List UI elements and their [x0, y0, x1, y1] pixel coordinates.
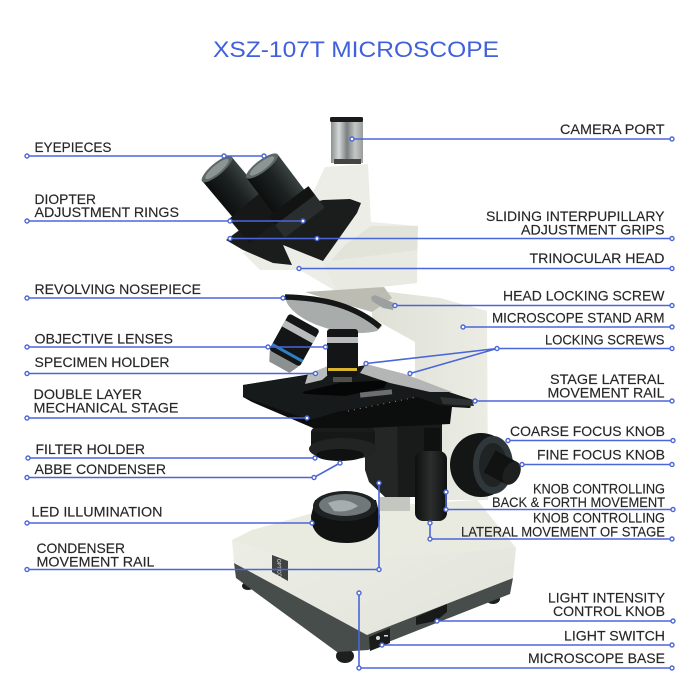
label: objective lenses	[25, 330, 328, 349]
label: knob controlling lateral movement of stage: KNOB CONTROLLING	[533, 510, 665, 526]
label: stage lateral movement rail	[473, 371, 674, 403]
label: stage lateral movement rail: MOVEMENT RAIL	[548, 384, 665, 400]
label: head locking screw	[393, 288, 674, 308]
label: condenser movement rail: CONDENSER	[36, 540, 125, 556]
label: diopter adjustment rings: DIOPTER	[34, 191, 96, 207]
label: specimen holder	[25, 354, 318, 376]
label: eyepieces	[25, 139, 266, 158]
label: microscope stand arm	[461, 309, 674, 329]
brand plate	[272, 555, 288, 581]
label: Abbe condenser	[25, 461, 342, 480]
light intensity knob	[416, 604, 447, 625]
label: microscope base: MICROSCOPE BASE	[528, 650, 665, 666]
light switch	[369, 628, 390, 651]
label: stage lateral movement rail: STAGE LATERAL	[550, 371, 665, 387]
label: head locking screw: HEAD LOCKING SCREW	[503, 288, 665, 304]
label: double layer mechanical stage: MECHANICAL STAGE	[34, 400, 179, 416]
microscope illustration	[196, 117, 525, 663]
label: locking screws: LOCKING SCREWS	[545, 331, 664, 347]
label: specimen holder: SPECIMEN HOLDER	[34, 354, 170, 370]
label: camera port	[350, 121, 674, 141]
label: microscope stand arm: MICROSCOPE STAND ARM	[492, 309, 664, 325]
label: sliding interpupillary adjustment grips	[228, 208, 674, 240]
label: microscope base	[357, 591, 674, 670]
mechanical stage	[243, 364, 474, 428]
label: fine focus knob	[520, 447, 674, 466]
coarse focus knob	[450, 433, 525, 497]
head locking screw	[371, 295, 394, 310]
label: objective lenses: OBJECTIVE LENSES	[34, 330, 173, 346]
label: Abbe condenser: ABBE CONDENSER	[34, 461, 166, 477]
label: eyepieces: EYEPIECES	[34, 139, 112, 155]
label: diopter adjustment rings: ADJUSTMENT RINGS	[34, 204, 179, 220]
label: filter holder	[26, 441, 317, 460]
left objective lens	[264, 313, 320, 376]
trinocular head	[243, 117, 418, 292]
Abbe condenser	[309, 422, 377, 461]
label: knob controlling lateral movement of stage: LATERAL MOVEMENT OF STAGE	[461, 523, 665, 539]
microscope stand arm	[372, 290, 488, 500]
sliding interpupillary grips	[226, 199, 361, 265]
label: knob controlling back and forth movement: BACK & FORTH MOVEMENT	[492, 494, 665, 510]
microscope base	[232, 500, 516, 663]
label: trinocular head: TRINOCULAR HEAD	[530, 250, 664, 266]
label: trinocular head	[297, 250, 674, 270]
label: knob controlling lateral movement of stage	[428, 510, 674, 541]
label: diopter adjustment rings	[25, 191, 305, 223]
revolving nosepiece	[285, 287, 392, 333]
label: condenser movement rail	[25, 481, 381, 572]
brand plate: OPTICO	[275, 559, 282, 578]
stage plate	[360, 364, 452, 392]
right objective lens	[327, 329, 358, 382]
right eyepiece	[238, 146, 325, 238]
stage slot	[302, 380, 388, 396]
condenser rail and mechanism block	[365, 405, 442, 511]
label: knob controlling back and forth movement: KNOB CONTROLLING	[533, 480, 665, 496]
label: revolving nosepiece: REVOLVING NOSEPIECE	[34, 281, 201, 297]
left eyepiece	[196, 150, 285, 244]
lateral movement rail	[440, 397, 474, 406]
label: condenser movement rail: MOVEMENT RAIL	[36, 554, 155, 570]
label: sliding interpupillary adjustment grips: ADJUSTMENT GRIPS	[521, 222, 664, 238]
label: light switch	[380, 627, 674, 647]
label: revolving nosepiece	[25, 281, 285, 300]
label: filter holder: FILTER HOLDER	[36, 441, 145, 457]
LED illumination	[311, 491, 380, 543]
camera port	[330, 117, 363, 164]
specimen holder	[305, 366, 335, 384]
label: sliding interpupillary adjustment grips: SLIDING INTERPUPILLARY	[486, 208, 665, 224]
label: coarse focus knob: COARSE FOCUS KNOB	[510, 423, 665, 439]
fine focus knob	[484, 450, 525, 488]
label: LED illumination: LED ILLUMINATION	[32, 504, 162, 520]
label: light intensity control knob: CONTROL KNOB	[553, 603, 665, 619]
coaxial stage knobs	[415, 428, 447, 521]
title: XSZ-107T MICROSCOPE	[213, 37, 499, 62]
label: double layer mechanical stage: DOUBLE LAYER	[34, 386, 142, 402]
label: double layer mechanical stage	[25, 386, 309, 420]
label: light intensity control knob	[435, 590, 675, 623]
label: locking screws	[364, 331, 674, 376]
label: light intensity control knob: LIGHT INTENSITY	[548, 590, 666, 606]
label: fine focus knob: FINE FOCUS KNOB	[537, 447, 665, 463]
label: light switch: LIGHT SWITCH	[564, 627, 665, 643]
label: camera port: CAMERA PORT	[560, 121, 665, 137]
label: knob controlling back and forth movement	[444, 480, 675, 512]
label: LED illumination	[25, 504, 314, 525]
